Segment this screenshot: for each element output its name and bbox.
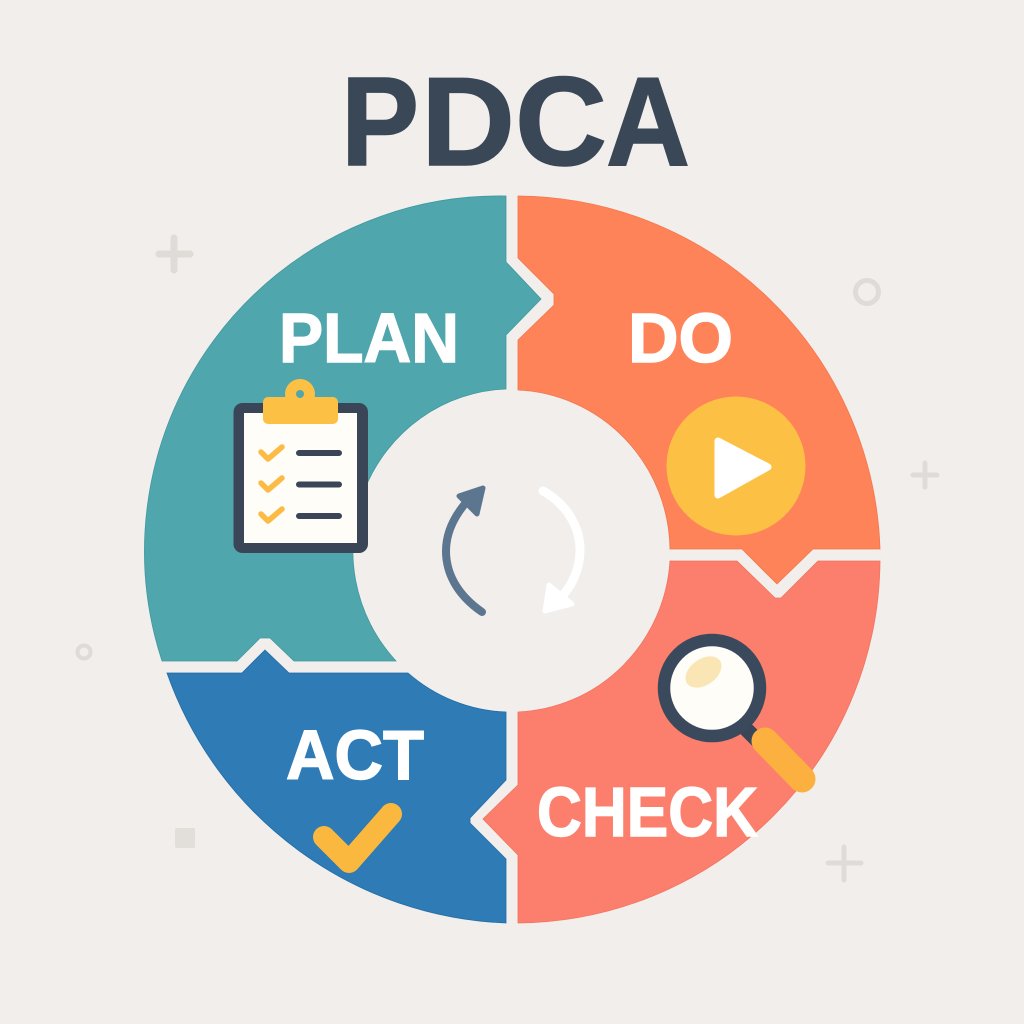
- icon: magnifying glass: [664, 640, 802, 779]
- label: plan: PLAN: [279, 299, 459, 377]
- arrow: clockwise white: [543, 491, 580, 611]
- label: check: CHECK: [537, 773, 758, 851]
- title: [341, 51, 690, 192]
- icon: play button: [666, 396, 806, 536]
- icon: check mark: [324, 814, 391, 862]
- decorative background marks: [78, 238, 937, 880]
- panel: act: [167, 650, 506, 923]
- arrow: counter-clockwise dark: [446, 488, 483, 612]
- title: C: [515, 51, 607, 192]
- title: P: [341, 51, 419, 192]
- panel: plan: [145, 196, 541, 661]
- label: act: ACT: [286, 716, 424, 794]
- icon: clipboard: [234, 379, 368, 553]
- title: A: [606, 51, 690, 192]
- center cycle arrows: [446, 488, 580, 612]
- title: D: [421, 51, 515, 192]
- panel: check: [483, 561, 880, 923]
- panel: do: [518, 196, 880, 584]
- label: do: DO: [628, 299, 733, 377]
